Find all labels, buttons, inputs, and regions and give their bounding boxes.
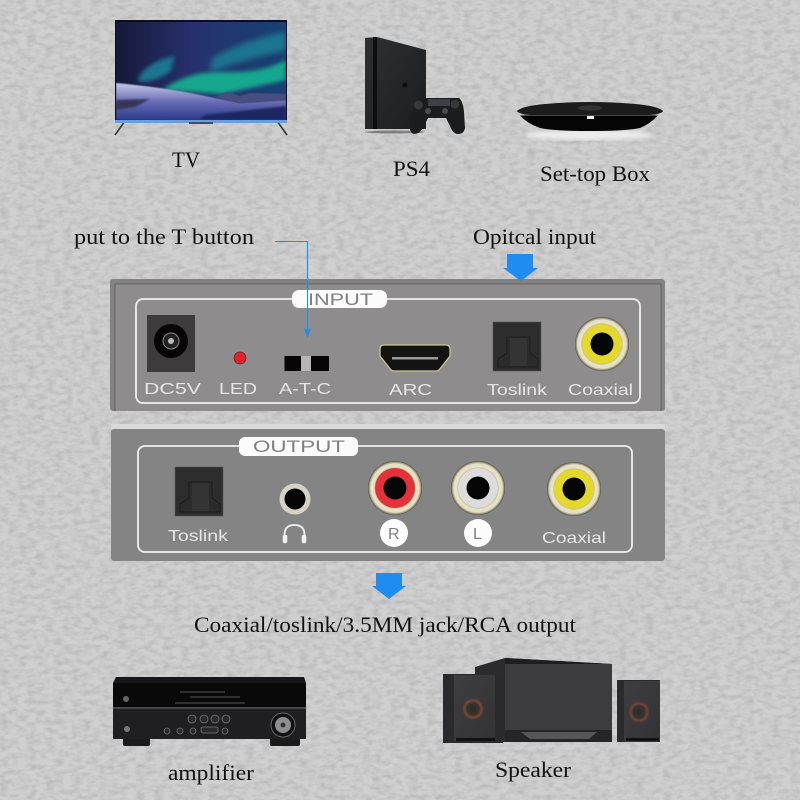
label: INPUT: INPUT — [308, 291, 373, 309]
port: ARC HDMI — [380, 345, 450, 399]
port: input Coaxial — [568, 317, 633, 399]
caption: Speaker: Speaker — [495, 757, 572, 782]
label: OUTPUT — [239, 437, 358, 456]
port: output Toslink — [168, 467, 229, 545]
caption: TV: TV — [172, 147, 200, 172]
switch: A-T-C: A-T-C — [279, 381, 331, 398]
indicator: LED — [219, 352, 257, 398]
arrow: optical input — [503, 254, 538, 281]
port: output Coaxial — [542, 462, 606, 547]
port: 3.5mm headphone jack — [280, 484, 310, 543]
label: OUTPUT: OUTPUT — [253, 438, 345, 456]
caption: amplifier: amplifier — [168, 760, 255, 785]
icon: speakers — [443, 658, 660, 743]
port: input Toslink — [487, 322, 548, 399]
icon: headphones — [283, 525, 306, 543]
caption: Optical input: Opitcal input — [473, 224, 596, 249]
caption: Set-top Box: Set-top Box — [540, 161, 650, 186]
port: DC5V jack: DC5V — [144, 381, 201, 398]
switch: A-T-C — [279, 356, 331, 398]
icon: TV — [115, 20, 287, 135]
port: left audio RCA — [451, 461, 505, 547]
port: right audio RCA — [368, 461, 422, 547]
icon: PS4 console and controller — [365, 37, 465, 134]
port: input Coaxial: Coaxial — [568, 382, 633, 399]
port: ARC HDMI: ARC — [389, 382, 432, 399]
panel: output — [111, 429, 665, 561]
icon: amplifier — [113, 677, 306, 746]
port: output Coaxial: Coaxial — [542, 530, 606, 547]
port: right audio RCA: R — [388, 526, 400, 543]
port: DC5V jack — [144, 315, 201, 398]
output panel highlight strip — [111, 424, 665, 429]
panel: input — [110, 279, 665, 411]
indicator: LED: LED — [219, 381, 257, 398]
caption: put to the T button: put to the T button — [74, 224, 254, 249]
arrow: pointer to T button — [275, 242, 311, 338]
label: INPUT — [292, 290, 387, 309]
caption: output types: Coaxial/toslink/3.5MM jack/RCA output — [194, 612, 576, 637]
caption: PS4: PS4 — [393, 156, 430, 181]
port: input Toslink: Toslink — [487, 382, 548, 399]
port: left audio RCA: L — [473, 526, 482, 543]
icon: set-top box — [517, 102, 663, 140]
arrow: output — [372, 573, 406, 599]
port: output Toslink: Toslink — [168, 528, 229, 545]
